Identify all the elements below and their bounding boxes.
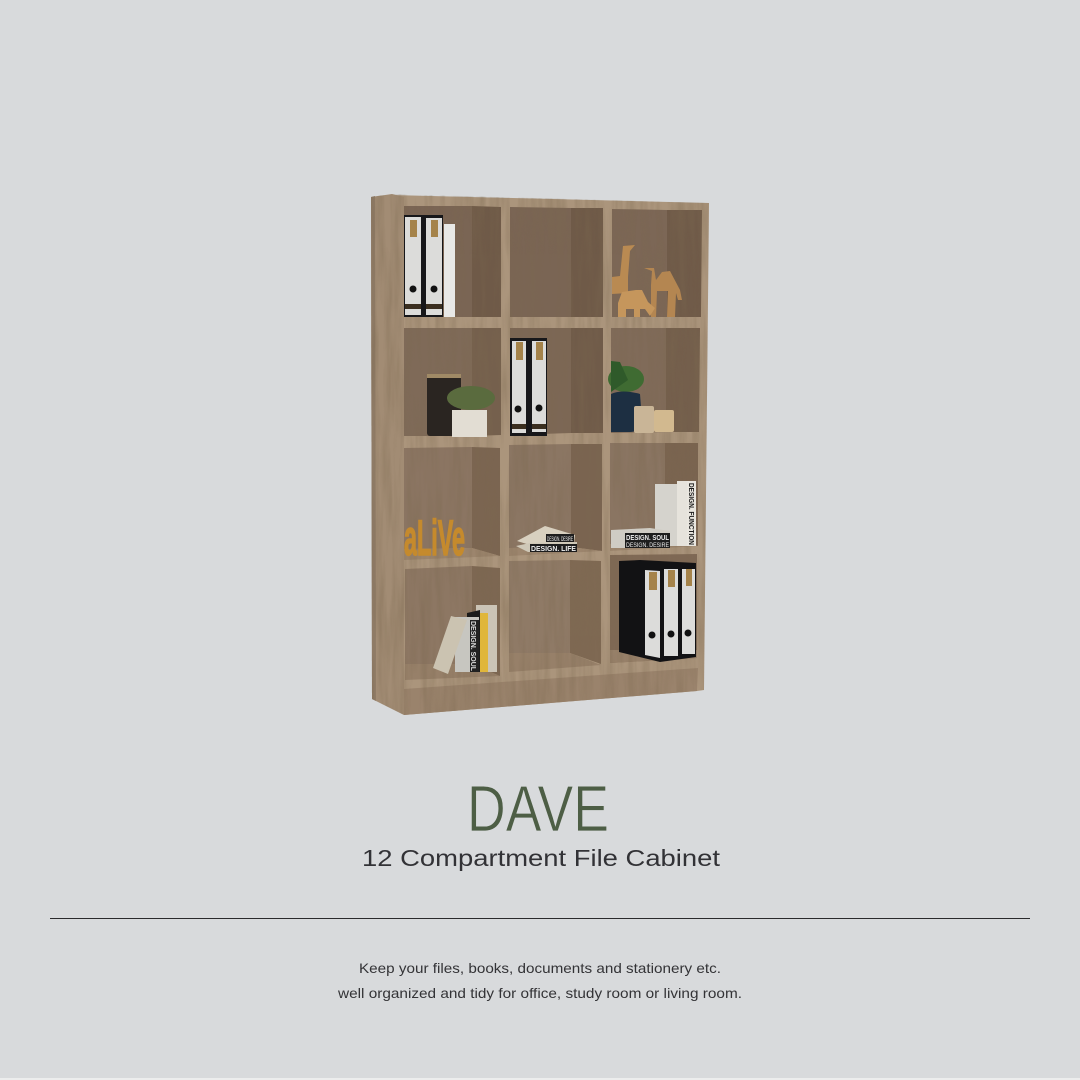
books centre <box>516 526 577 553</box>
title: DAVE <box>467 772 609 845</box>
plant and pots middle row <box>427 374 495 437</box>
wood grain texture <box>371 194 709 716</box>
wooden animal figures <box>612 245 682 317</box>
books right: DESIGN. SOUL <box>626 533 669 542</box>
description text: Keep your files, books, documents and stationery etc. <box>359 960 721 976</box>
green plant and candles <box>608 361 674 433</box>
divider <box>50 918 1030 919</box>
plinth <box>404 668 698 715</box>
books right: DESIGN. FUNCTION <box>687 483 696 545</box>
books centre: DESIGN. LIFE <box>531 544 576 553</box>
description text: well organized and tidy for office, study room or living room. <box>337 985 742 1001</box>
subtitle: 12 Compartment File Cabinet <box>362 845 721 871</box>
binders centre <box>510 338 547 436</box>
cabinet front frame <box>392 195 709 715</box>
cells row 4 <box>405 554 697 680</box>
cells row 3 <box>404 443 698 560</box>
binders top left <box>404 215 455 317</box>
description text <box>337 960 742 1001</box>
binders bottom right <box>619 560 696 662</box>
books bottom left <box>433 605 497 674</box>
books right <box>611 481 696 549</box>
books bottom left: DESIGN. SOUL <box>469 621 476 672</box>
cells row 1 <box>404 206 702 317</box>
cabinet illustration: aLiVe <box>404 510 465 566</box>
cabinet side panel <box>371 194 404 715</box>
cabinet illustration <box>371 194 709 716</box>
cells row 2 <box>404 328 700 436</box>
books right: DESIGN. DESIRE <box>626 542 670 549</box>
books centre: DESIGN. DESIRE <box>547 537 573 543</box>
